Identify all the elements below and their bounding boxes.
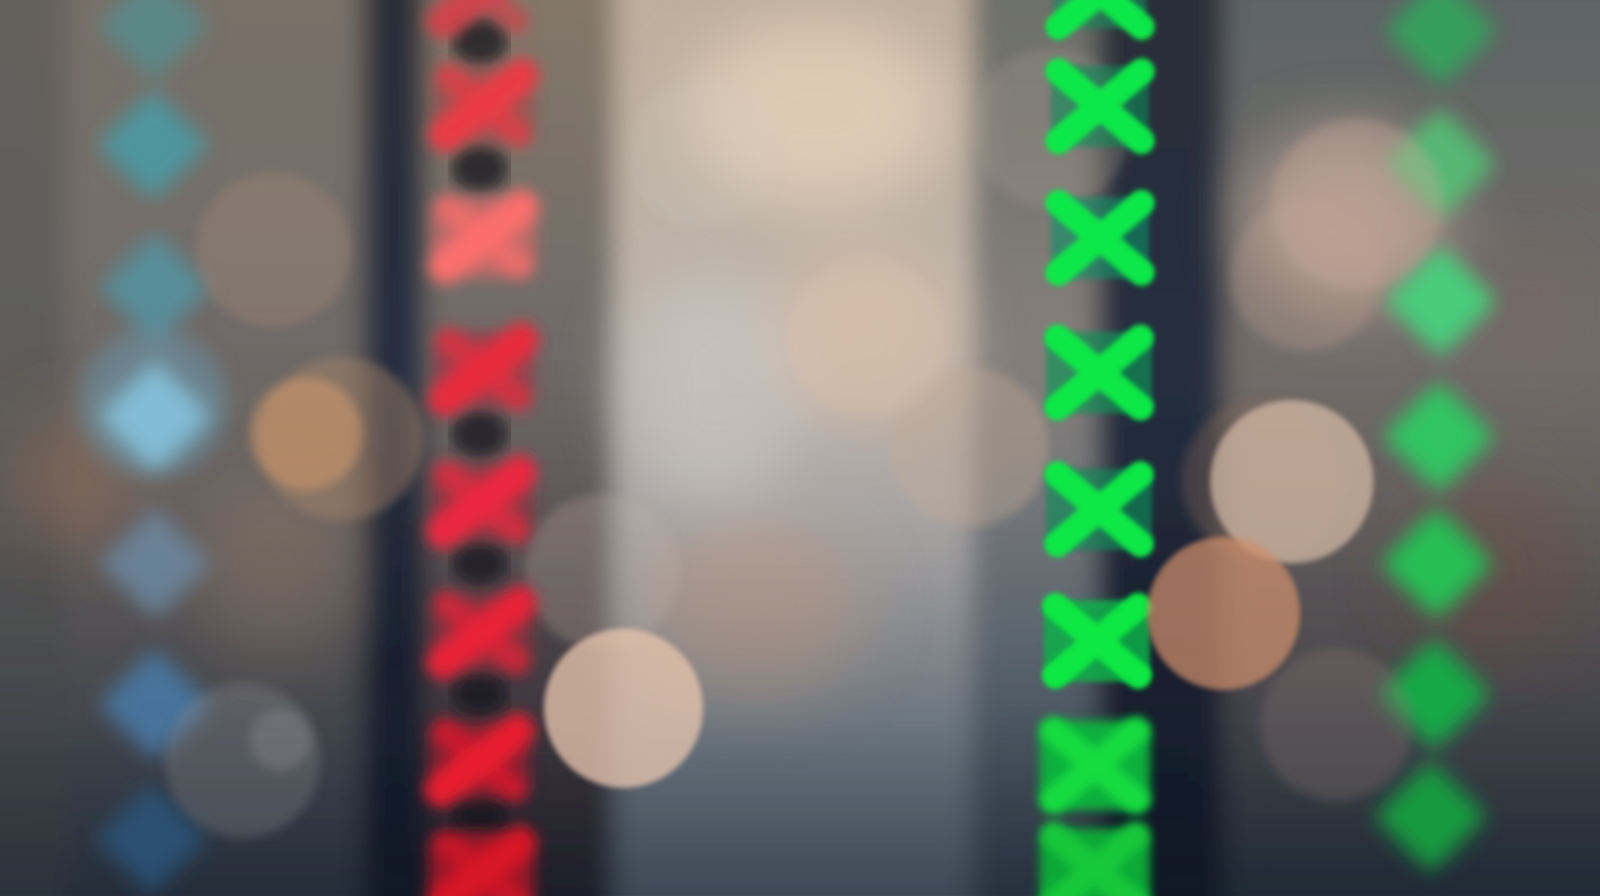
dark gaps between red crosses — [451, 16, 508, 835]
bokeh circles left — [165, 172, 423, 838]
red crosses column — [417, 0, 546, 896]
bokeh circles foreground — [544, 400, 1373, 788]
soft glow: warm haze in centre — [10, 20, 1592, 704]
bokeh circles centre — [524, 48, 1131, 649]
blue diamonds column — [80, 0, 227, 895]
bokeh circle: pale peach — [544, 629, 703, 788]
bokeh circle: pale over green column — [1210, 400, 1373, 563]
bokeh circle: orange — [1147, 537, 1300, 690]
green crosses column — [1035, 0, 1160, 896]
bokeh circles right — [1182, 118, 1443, 801]
green diamonds column — [1374, 0, 1497, 873]
